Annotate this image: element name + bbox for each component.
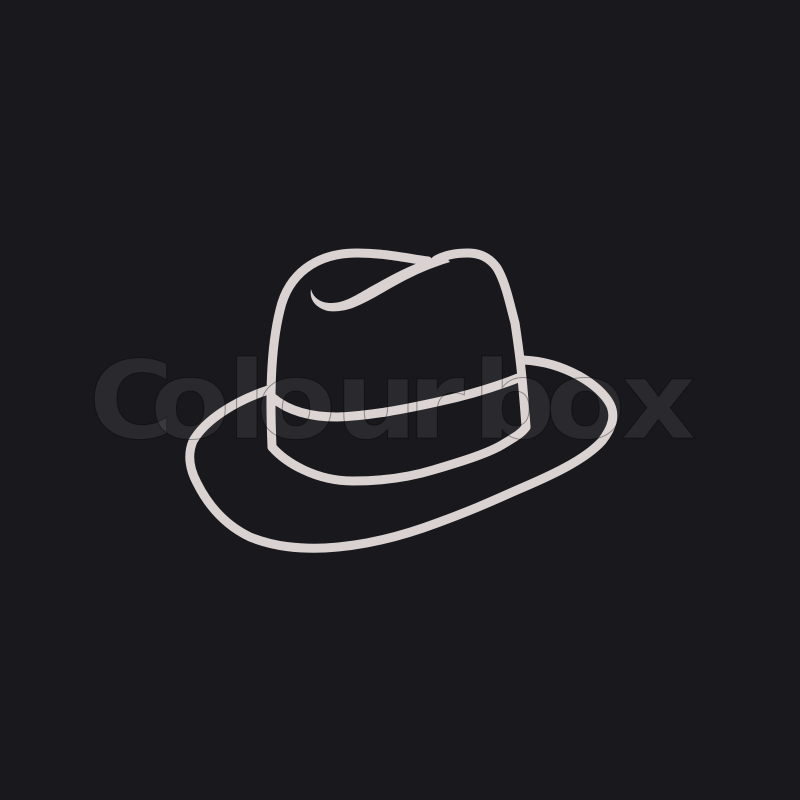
hat crown outline [271,253,526,447]
icon: hat [190,253,613,548]
hat band [273,378,518,417]
hat brim [190,360,613,548]
crown dent curl [311,256,450,311]
watermark text: Colourbox [89,338,696,464]
hat crown base [272,427,526,481]
